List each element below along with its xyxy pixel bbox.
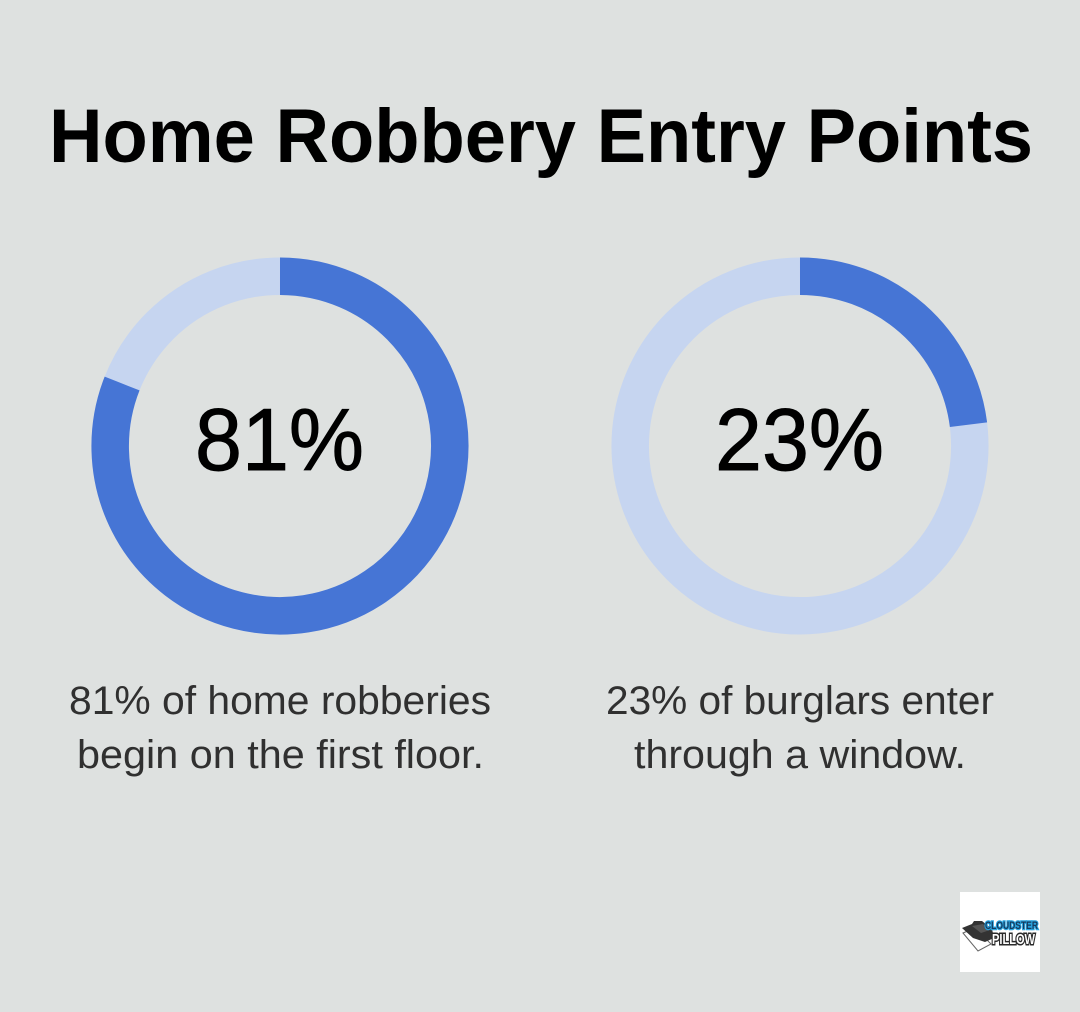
logo wordmark: CLOUDSTER [985, 920, 1038, 932]
logo wordmark [985, 920, 1038, 948]
value: 81%: 81% [195, 390, 364, 489]
caption: first floor: begin on the first floor. [77, 733, 484, 777]
caption: window: through a window. [634, 733, 966, 777]
logo wordmark: PILLOW [992, 931, 1036, 948]
donut chart: 81% [110, 276, 450, 616]
logo: Cloudster Pillow [960, 892, 1040, 972]
panel: first floor statistic [69, 276, 502, 777]
caption: window: 23% of burglars enter [606, 679, 994, 723]
donut chart: 23% [630, 276, 970, 616]
panel: window statistic [606, 276, 1005, 777]
caption: first floor: 81% of home robberies [69, 679, 491, 723]
value: 23%: 23% [715, 390, 884, 489]
title: Home Robbery Entry Points [49, 94, 1033, 179]
icon: pillow [962, 921, 994, 951]
